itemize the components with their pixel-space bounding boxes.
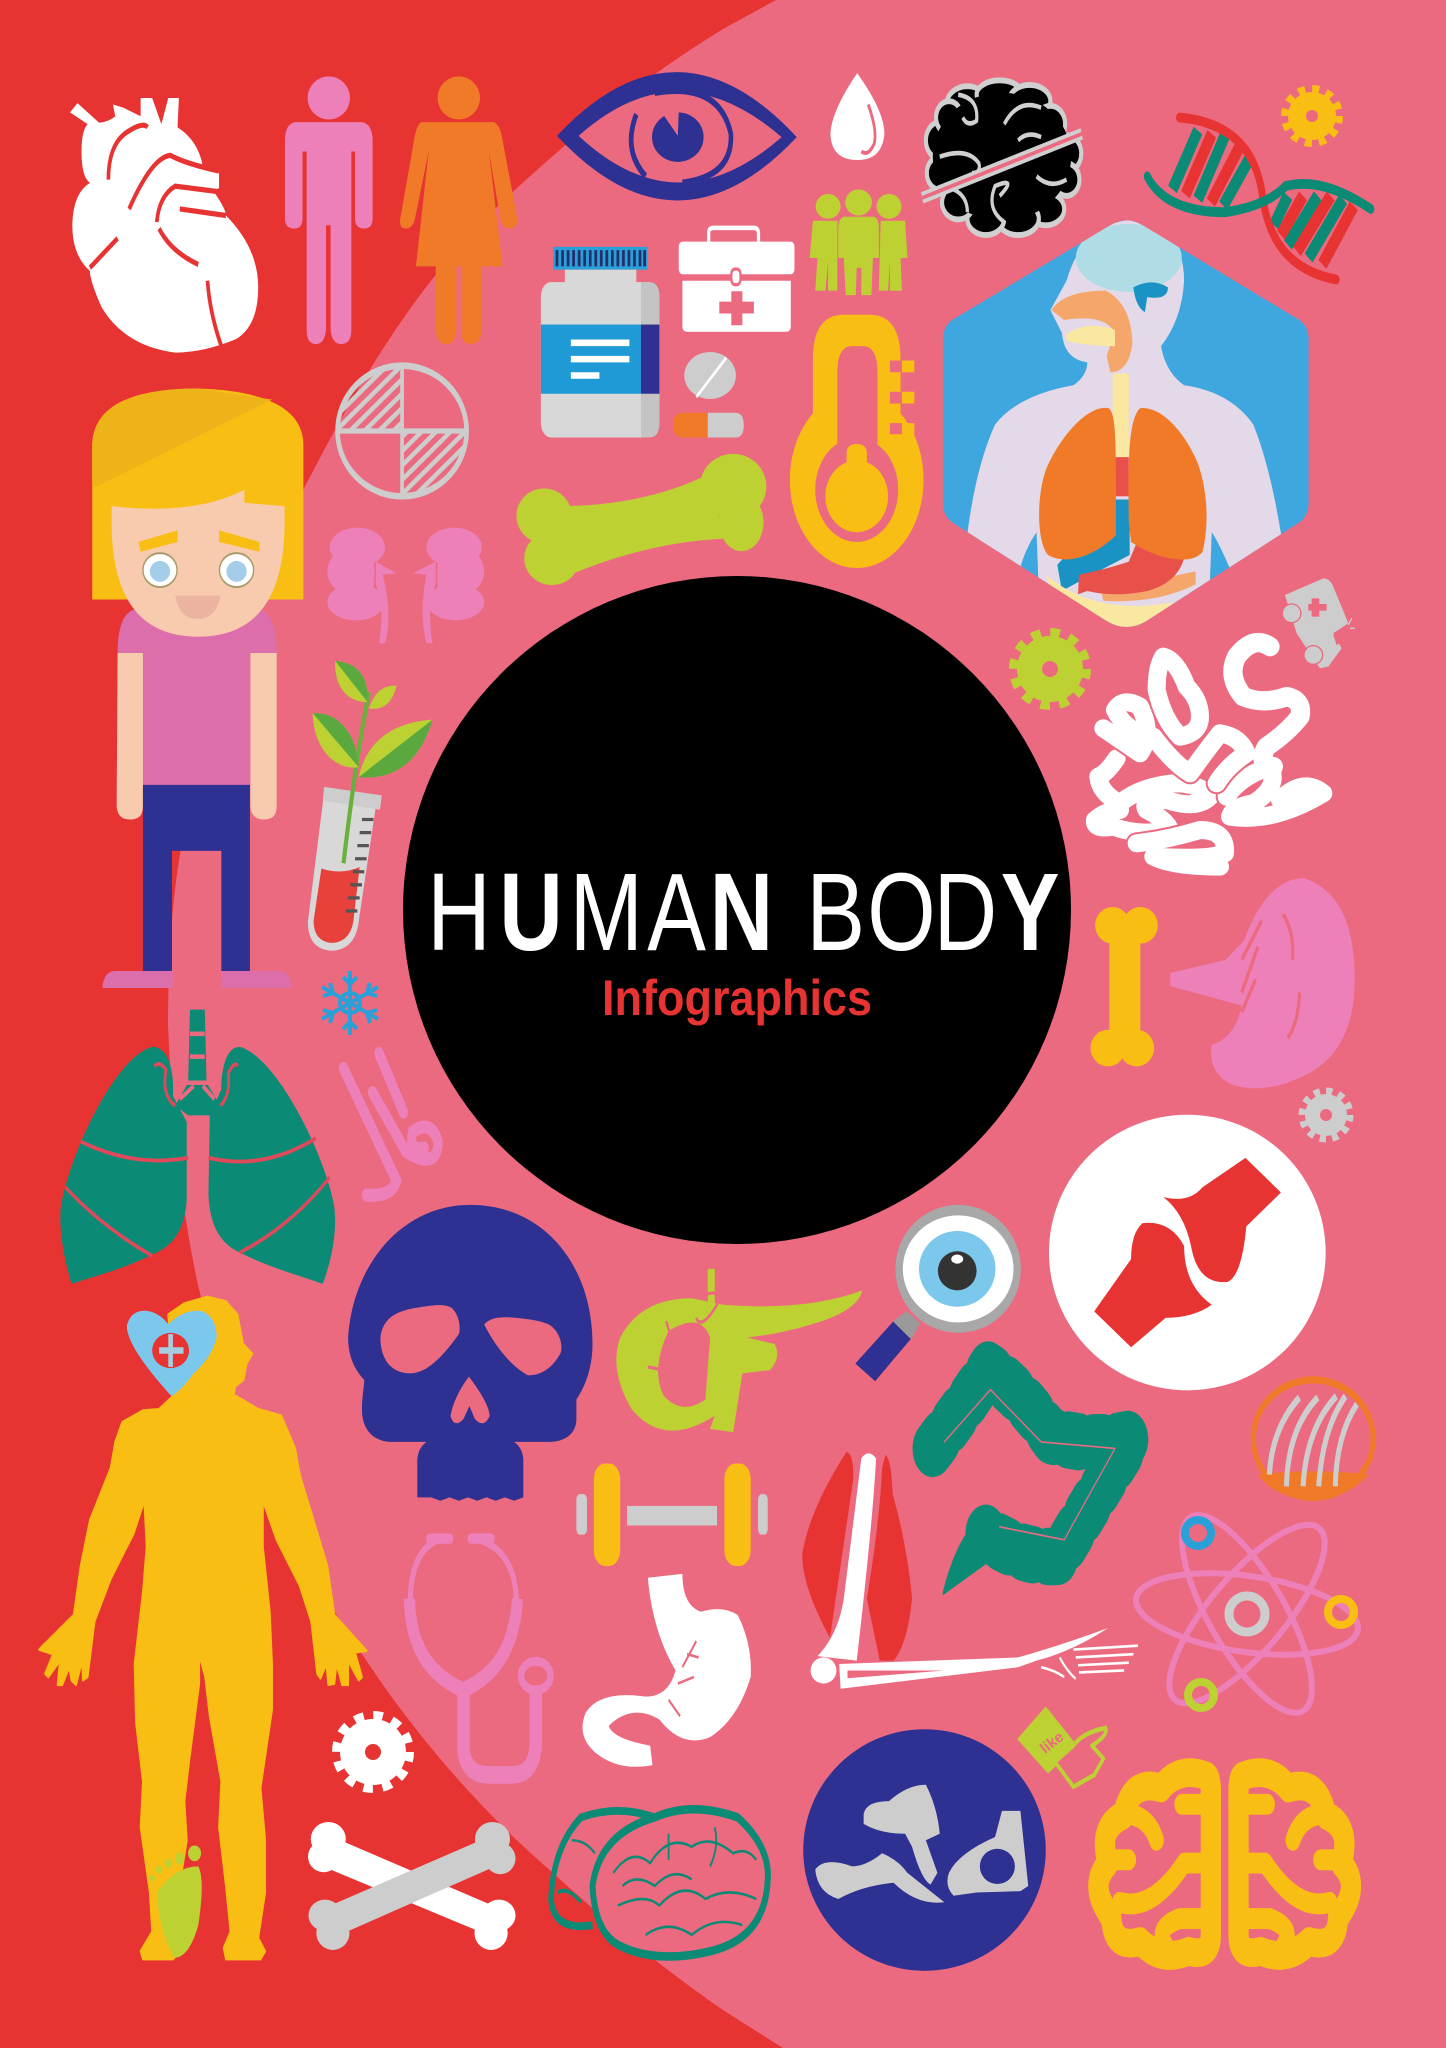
icon: yellow brain [1098, 1773, 1351, 1955]
icon: eye [557, 72, 797, 200]
icon: stethoscope [409, 1539, 551, 1775]
icon: green gear [1014, 633, 1086, 705]
icon: atom [1131, 1498, 1363, 1730]
title: D [934, 852, 997, 974]
icon: white gear [337, 1716, 409, 1788]
icon: pie circle [338, 366, 467, 496]
character: girl [92, 389, 303, 988]
icon: large intestine [933, 1370, 1131, 1593]
figure: yellow human body [39, 1297, 367, 1959]
panel: respiratory system hexagon [943, 220, 1309, 653]
icon: heart [70, 98, 258, 353]
icon: grey gear [1302, 1091, 1350, 1139]
icon: thumbs up like: like [1037, 1728, 1067, 1757]
icon: magnifier with eye [855, 1210, 1017, 1381]
icon: yellow bone [1090, 907, 1158, 1066]
icon: woman [400, 76, 517, 344]
title: O [867, 852, 936, 974]
icon: pills [673, 352, 744, 438]
icon: muscle and bones [802, 1452, 1138, 1689]
icon: teal lungs [60, 1010, 335, 1284]
icon: thermometer [790, 315, 924, 568]
icon: teal brain [551, 1809, 768, 1956]
icon: man [285, 76, 373, 344]
icon: joint circle [1049, 1115, 1326, 1390]
icon: DNA [1147, 118, 1371, 279]
title: B [806, 852, 865, 974]
icon: stomach [583, 1574, 751, 1767]
black title circle [403, 576, 1071, 1244]
subtitle: Infographics [602, 970, 872, 1026]
title: A [647, 852, 706, 974]
icon: green bone [516, 454, 766, 585]
title: N [710, 852, 773, 974]
icon: data drop [830, 73, 884, 160]
icon: medicine bottle [541, 247, 659, 438]
icon: hair follicle circle [1253, 1380, 1373, 1499]
icon: plant in test tube [310, 661, 433, 948]
icon: spleen [1170, 878, 1355, 1088]
icon: black brain [922, 80, 1082, 235]
icon: people group [810, 189, 907, 295]
icon: crossbones [308, 1822, 516, 1950]
title: H [427, 852, 491, 974]
title: Y [1001, 852, 1059, 974]
icon: ambulance [1282, 578, 1355, 668]
icon: thumbs up like [1017, 1706, 1106, 1787]
icon: small intestine [1095, 643, 1323, 867]
icon: skull [348, 1205, 593, 1501]
title: U [499, 852, 563, 974]
title: M [570, 852, 643, 974]
icon: wind [344, 1053, 438, 1195]
icon: yellow gear [1285, 89, 1339, 143]
icon: dumbbell [576, 1463, 768, 1566]
icon: kidneys [327, 528, 484, 643]
icon: snowflake [322, 971, 378, 1035]
icon: first aid kit [679, 228, 794, 332]
icon: pancreas [616, 1269, 862, 1432]
icon: navy circle with bones [803, 1729, 1046, 1971]
